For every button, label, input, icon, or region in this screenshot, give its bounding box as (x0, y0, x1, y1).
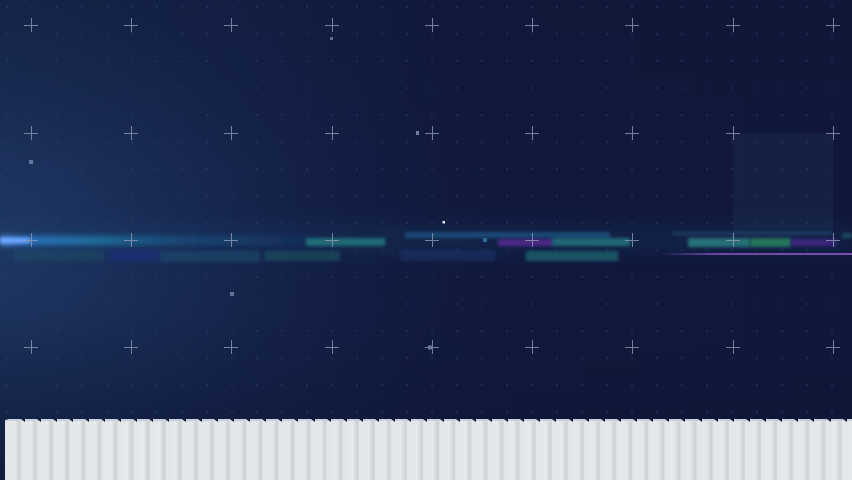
crosshair grid (24, 18, 840, 354)
floating particles (29, 37, 487, 350)
faint translucent panel (733, 133, 833, 233)
purple line (660, 253, 852, 255)
light streak bands (0, 224, 852, 262)
white bars row (5, 419, 852, 480)
